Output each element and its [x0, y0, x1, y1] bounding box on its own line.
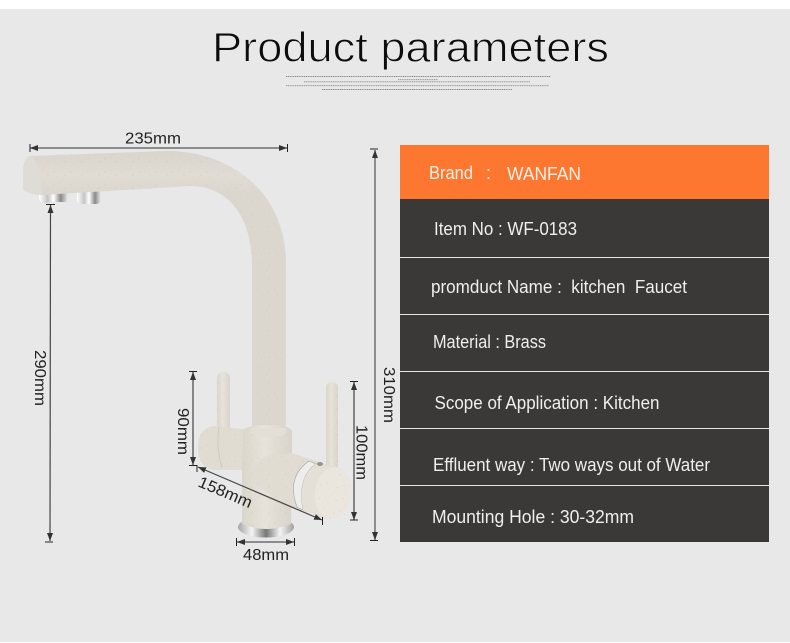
- dimension: 158mm: 158mm: [195, 474, 255, 512]
- dimension: 290mm: 290mm: [31, 350, 48, 406]
- spout: [23, 151, 286, 440]
- row: brand: [400, 145, 769, 199]
- row: brand: WANFAN: [507, 163, 581, 184]
- row: mounting hole: Mounting Hole : 30-32mm: [432, 506, 634, 527]
- row: brand: Brand: [429, 162, 473, 183]
- row: item no: Item No : WF-0183: [434, 218, 577, 239]
- title: Product parameters: [212, 24, 609, 70]
- dimension: 235mm: 235mm: [125, 130, 181, 148]
- dimension: 48mm: 48mm: [243, 547, 289, 564]
- subtitle microtext: [286, 76, 551, 90]
- dimension: 100mm: [350, 382, 370, 520]
- dimension: 100mm: 100mm: [352, 425, 370, 480]
- end cap: [312, 465, 354, 521]
- dimension: 90mm: 90mm: [174, 408, 191, 455]
- dimension: 90mm: [174, 372, 197, 466]
- faucet illustration: [23, 151, 354, 538]
- right cylinder: [252, 453, 354, 521]
- row: material: Material : Brass: [433, 331, 546, 352]
- panel: specifications table: [400, 145, 769, 542]
- dimension: 48mm: [236, 538, 294, 564]
- chrome base: [238, 516, 294, 538]
- dark table body: [400, 199, 769, 542]
- chrome ring: [293, 461, 316, 510]
- row: brand: :: [486, 162, 491, 183]
- row: effluent way: Effluent way : Two ways out of Water: [433, 454, 710, 475]
- row: scope: Scope of Application : Kitchen: [434, 392, 660, 413]
- dimension: 290mm: [31, 204, 55, 542]
- left cylinder: [198, 426, 250, 470]
- row: product name: promduct Name : kitchen Faucet: [431, 276, 687, 297]
- dimension: 235mm: [30, 130, 288, 152]
- lower column: [242, 425, 292, 529]
- dimension: 158mm: [195, 465, 322, 525]
- left lever: [217, 372, 230, 432]
- right lever: [326, 382, 338, 474]
- dimension: 310mm: 310mm: [380, 367, 397, 423]
- dimension: 310mm: [370, 149, 397, 540]
- aerators: [39, 188, 101, 204]
